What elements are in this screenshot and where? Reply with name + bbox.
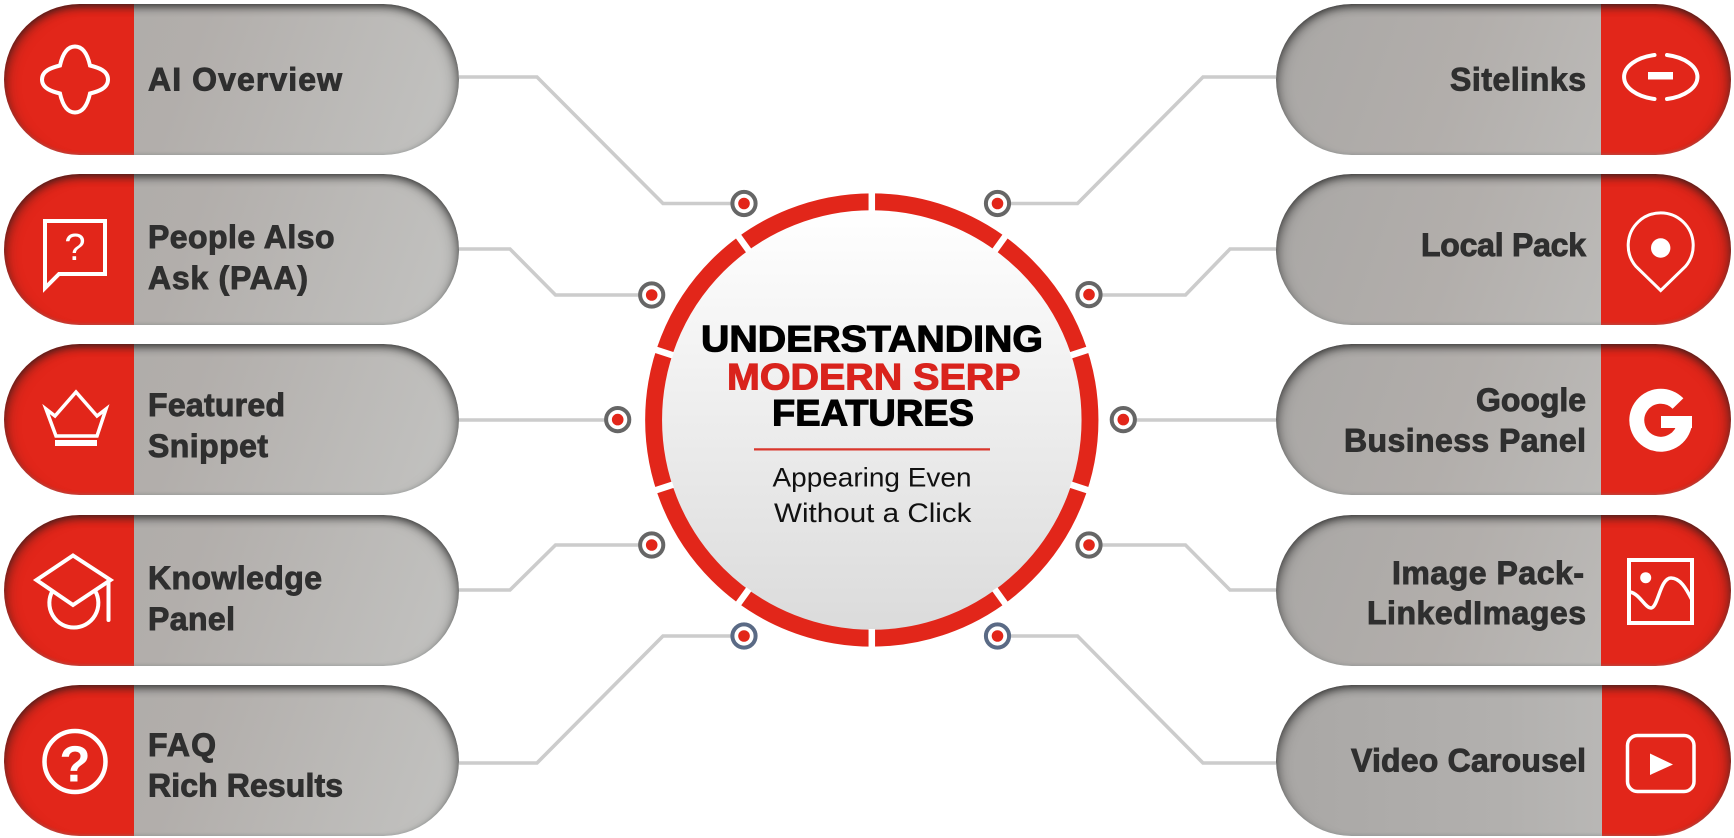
label: Google [1476,382,1586,418]
label: Featured [148,387,285,423]
connector: Google Business Panel [1112,408,1276,431]
label: Snippet [148,428,268,464]
icon: Google G [1637,396,1692,444]
label: Ask (PAA) [148,260,308,296]
icon: circled question mark: ? [59,736,91,792]
panel: Image Pack [1276,515,1731,666]
label [1344,382,1586,458]
panel: Sitelinks [1276,4,1731,154]
icon: graduation cap [36,556,110,628]
subtitle [772,463,972,528]
label: Business Panel [1344,422,1586,458]
icon: map pin [1628,213,1693,290]
label: Video Carousel [1351,742,1586,778]
subtitle: Without a Click [774,498,972,528]
label: Knowledge [148,560,322,596]
panel: AI Overview [4,4,459,154]
title: FEATURES [772,392,974,434]
label: Sitelinks [1450,61,1586,97]
icon: sitelink capsule [1624,54,1697,98]
icon: image frame [1629,560,1692,623]
connector: Image Pack [1077,533,1276,590]
label [148,560,322,637]
label: Image Pack- [1392,555,1584,591]
title: UNDERSTANDING [701,318,1043,360]
label: FAQ [148,727,216,763]
title [701,318,1043,434]
central circle with segmented red ring [654,192,1090,648]
connector: FAQ Rich Results [459,624,756,763]
label: Rich Results [148,768,343,804]
panel: Featured Snippet [4,344,459,495]
connector: Local Pack [1077,249,1276,306]
connector: Featured Snippet [459,408,629,431]
panel: Knowledge Panel [4,515,459,666]
icon: circled question mark [44,731,106,792]
connector: People Also Ask [459,249,663,307]
label [148,387,285,464]
label: AI Overview [148,61,342,97]
connector: Video Carousel [986,624,1276,763]
panel: People Also Ask [4,174,459,325]
title: MODERN SERP [727,355,1020,397]
label: LinkedImages [1367,595,1586,631]
connector: Sitelinks [986,77,1276,215]
panel: FAQ Rich Results [4,685,459,836]
label [148,727,343,804]
label: Panel [148,601,235,637]
icon: speech bubble question: ? [64,227,86,269]
label [1367,555,1586,631]
icon: four-point star [42,46,108,112]
panel: Google Business Panel [1276,344,1731,495]
icon: crown [46,392,106,446]
subtitle: Appearing Even [772,463,972,493]
panel: Video Carousel [1276,685,1731,836]
panel: Local Pack [1276,174,1731,325]
label [148,219,334,296]
icon: video play [1628,736,1694,792]
connector: AI Overview [459,77,756,215]
icon: speech bubble question [45,221,105,288]
label: Local Pack [1421,227,1586,263]
connector: Knowledge Panel [459,533,663,590]
label: People Also [148,219,334,255]
